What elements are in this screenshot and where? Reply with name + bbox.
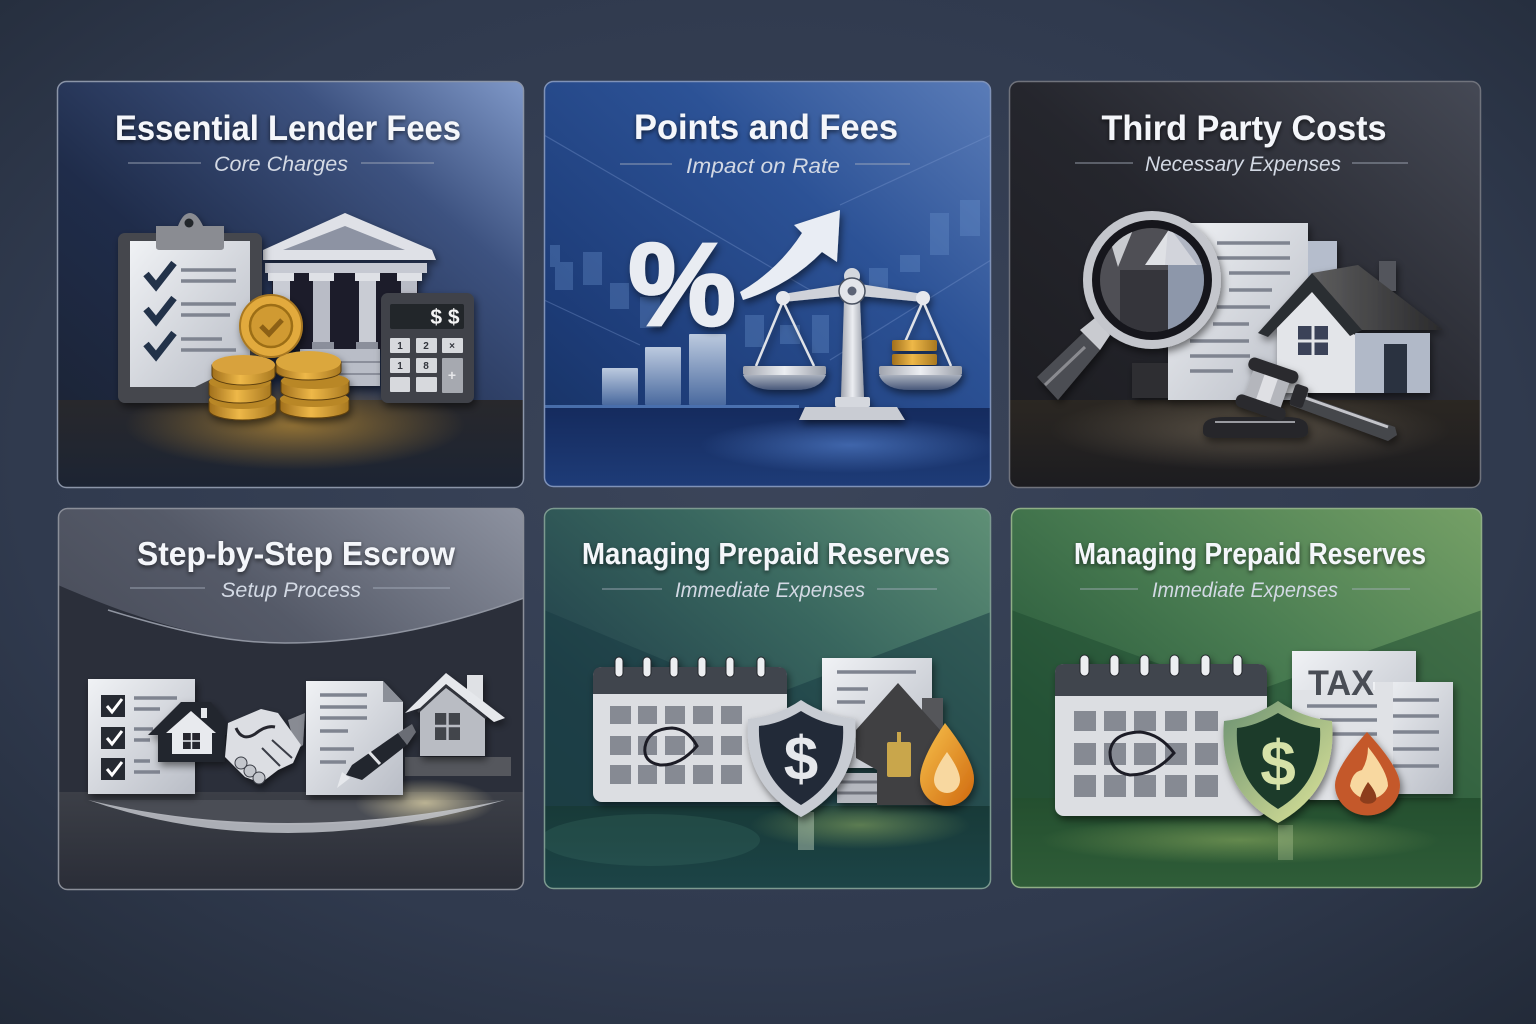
icon: shield with dollar: $	[784, 725, 818, 794]
icon: orange drop	[920, 723, 974, 806]
heading: step-by-step escrow: Step-by-Step Escrow	[137, 535, 455, 572]
icon: green shield with dollar: $	[1260, 727, 1296, 799]
icon: calendar	[1055, 655, 1267, 816]
icon: calculator	[381, 293, 474, 403]
icon: house right	[405, 673, 505, 756]
icon: calculator: ×	[449, 341, 455, 352]
icon: flame	[1335, 732, 1400, 815]
icon: tax documents	[1292, 651, 1453, 800]
icon: checklist	[88, 679, 195, 794]
icon: calculator: 2	[423, 341, 429, 352]
icon: calculator: 8	[423, 361, 429, 372]
subheading: impact on rate: Impact on Rate	[686, 155, 840, 178]
icon: gold coins	[209, 295, 349, 420]
subheading: setup process: Setup Process	[221, 579, 362, 602]
icon: calendar	[593, 657, 787, 802]
icon: tax documents: TAX	[1308, 664, 1375, 703]
icon: bank building	[263, 213, 436, 386]
panel: step-by-step escrow	[58, 508, 524, 890]
icon: documents	[1132, 223, 1337, 400]
heading: essential lender fees: Essential Lender Fees	[115, 109, 461, 148]
icon: small house	[148, 702, 235, 762]
icon: green shield with dollar	[1223, 701, 1333, 823]
subheading: core charges: Core Charges	[214, 153, 349, 176]
icon: handshake	[225, 709, 305, 784]
icon: calculator: $ $	[430, 306, 460, 329]
heading: third party costs: Third Party Costs	[1102, 109, 1386, 148]
icon: calculator: 1	[397, 361, 403, 372]
subheading: immediate expenses: Immediate Expenses	[1152, 579, 1338, 602]
icon: document and house	[822, 658, 943, 805]
heading: managing prepaid reserves: Managing Prepaid Reserves	[1074, 536, 1426, 571]
panel: managing prepaid reserves, tax	[1011, 508, 1482, 888]
heading: managing prepaid reserves: Managing Prepaid Reserves	[582, 536, 950, 571]
subheading: immediate expenses: Immediate Expenses	[675, 579, 865, 602]
icon: balance scale	[743, 268, 962, 420]
icon: gavel	[1203, 356, 1397, 441]
icon: percent sign: %	[628, 219, 736, 351]
icon: clipboard checklist	[118, 213, 262, 403]
icon: calculator: 1	[397, 341, 403, 352]
arrow: rising	[740, 210, 840, 300]
icon: calculator: +	[448, 367, 456, 383]
panel: managing prepaid reserves, house	[540, 508, 991, 889]
panel: third party costs	[1009, 82, 1481, 488]
subheading: necessary expenses: Necessary Expenses	[1145, 153, 1341, 176]
icon: document and pen	[306, 681, 416, 795]
icon: magnifying glass	[1037, 211, 1228, 400]
icon: house	[1258, 261, 1443, 393]
panel: points and fees	[544, 82, 1000, 488]
panel: essential lender fees	[57, 82, 524, 488]
icon: shield with dollar	[748, 700, 855, 817]
bar chart	[602, 334, 726, 405]
heading: points and fees: Points and Fees	[634, 108, 898, 147]
